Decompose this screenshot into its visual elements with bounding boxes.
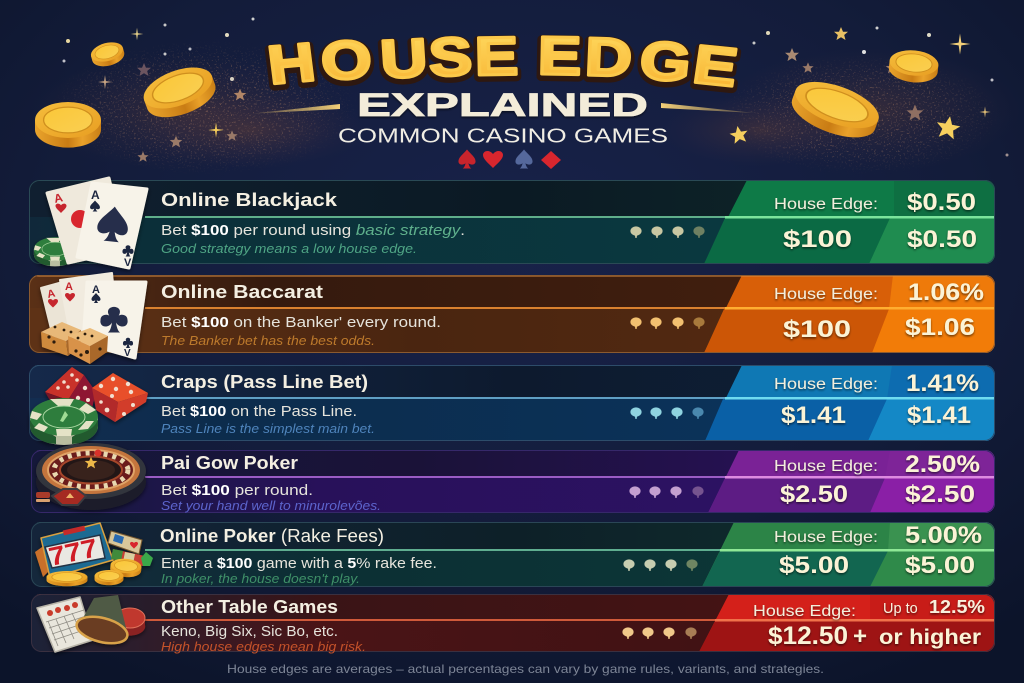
text: pai gow description: Bet $100 per round. <box>161 483 313 499</box>
house edge value: 1.41% <box>906 370 979 397</box>
house edge value: 2.50% <box>905 451 980 478</box>
icon: cards and dice: A <box>65 281 73 293</box>
house edge label: House Edge: <box>774 196 878 213</box>
icon: playing cards and chip: A <box>91 188 100 202</box>
bet amount: $100 <box>783 226 852 253</box>
icon: cards and dice: A <box>46 288 56 301</box>
rating dots <box>622 627 697 639</box>
panel: pai gow poker <box>31 443 995 513</box>
panel: craps <box>29 365 995 445</box>
coins <box>35 39 940 148</box>
icon: roulette wheel and chips <box>36 443 146 510</box>
text: other games description: Keno, Big Six, Sic Bo, etc. <box>161 624 338 640</box>
icon: playing cards and chip <box>34 178 147 269</box>
text: blackjack note: Good strategy means a low house edge. <box>161 242 417 256</box>
panel: online blackjack <box>29 178 995 269</box>
house edge label: House Edge: <box>774 376 878 393</box>
house edge label: House Edge: <box>753 603 856 620</box>
icon: playing cards and chip: V <box>124 257 132 269</box>
text: pai gow note: Set your hand well to minurolevões. <box>161 499 381 513</box>
house edge value: 1.06% <box>908 279 984 306</box>
bet amount: $1.41 <box>781 402 846 429</box>
icon: red dice and chip <box>30 367 148 445</box>
text: blackjack title: Online Blackjack <box>161 190 338 210</box>
cost amount: + <box>853 623 867 650</box>
rating dots <box>630 317 705 329</box>
bet amount: $5.00 <box>779 552 849 579</box>
icon: cards and dice: V <box>124 348 131 359</box>
cost amount: $1.06 <box>905 314 975 341</box>
house edge value: 12.5% <box>929 596 985 617</box>
cost amount: $12.50 <box>768 622 848 650</box>
icon: slot machine and coins <box>35 523 153 586</box>
text: baccarat note: The Banker bet has the best odds. <box>161 334 375 348</box>
panel: other table games <box>31 594 995 654</box>
panel: online baccarat <box>29 273 995 364</box>
house edge label: House Edge: <box>774 286 878 303</box>
cost amount: $2.50 <box>905 481 975 508</box>
text: craps title: Craps (Pass Line Bet) <box>161 372 368 392</box>
cost amount: $0.50 <box>907 226 977 253</box>
text: blackjack description: Bet $100 per round using basic strategy . <box>161 223 465 239</box>
cost amount: $5.00 <box>905 552 975 579</box>
text: other games title: Other Table Games <box>161 597 338 617</box>
text: online poker note: In poker, the house doesn't play. <box>161 572 360 586</box>
text: craps description: Bet $100 on the Pass Line. <box>161 404 357 420</box>
subtitle: explained: EXPLAINED <box>357 87 648 123</box>
title: HOUSE EDGE <box>264 25 741 98</box>
text: baccarat title: Online Baccarat <box>161 282 323 302</box>
house edge value: $0.50 <box>907 189 976 216</box>
icon: cards and dice: A <box>92 284 100 296</box>
rating dots <box>630 407 704 419</box>
bet amount: $100 <box>783 316 851 343</box>
house edge label: House Edge: <box>774 529 878 546</box>
text: online poker title: Online Poker (Rake Fees) <box>160 526 384 546</box>
cost amount: or higher <box>879 626 981 649</box>
icon: slot machine and coins: 777 <box>46 532 100 572</box>
decorative gold lines <box>253 103 755 114</box>
icon: playing cards and chip: A <box>53 190 64 206</box>
rating dots <box>623 559 698 571</box>
subtitle: common casino games: COMMON CASINO GAMES <box>338 126 668 148</box>
dust and stars left <box>30 18 370 175</box>
suit icons <box>458 150 561 169</box>
text: baccarat description: Bet $100 on the Banker' every round. <box>161 315 441 331</box>
text: craps note: Pass Line is the simplest main bet. <box>161 422 375 436</box>
text: online poker description: Enter a $100 game with a 5% rake fee. <box>161 556 437 572</box>
icon: cards and dice <box>41 273 146 364</box>
house edge value: 5.00% <box>905 522 982 549</box>
dust and stars right <box>660 26 1020 175</box>
text: pai gow title: Pai Gow Poker <box>161 453 298 473</box>
cost amount: $1.41 <box>907 402 971 429</box>
house edge label: House Edge: <box>774 458 878 475</box>
bet amount: $2.50 <box>780 481 848 508</box>
footer note: House edges are averages – actual percentages can vary by game rules, variants, and strategies. <box>227 662 824 676</box>
icon: keno card, hat and chip <box>37 595 145 652</box>
rating dots <box>630 226 705 238</box>
panel: online poker <box>31 522 995 587</box>
rating dots <box>629 486 704 498</box>
title: HOUSE EDGE <box>264 28 741 101</box>
text: other games note: High house edges mean big risk. <box>161 640 366 654</box>
house edge value: Up to <box>883 601 918 617</box>
